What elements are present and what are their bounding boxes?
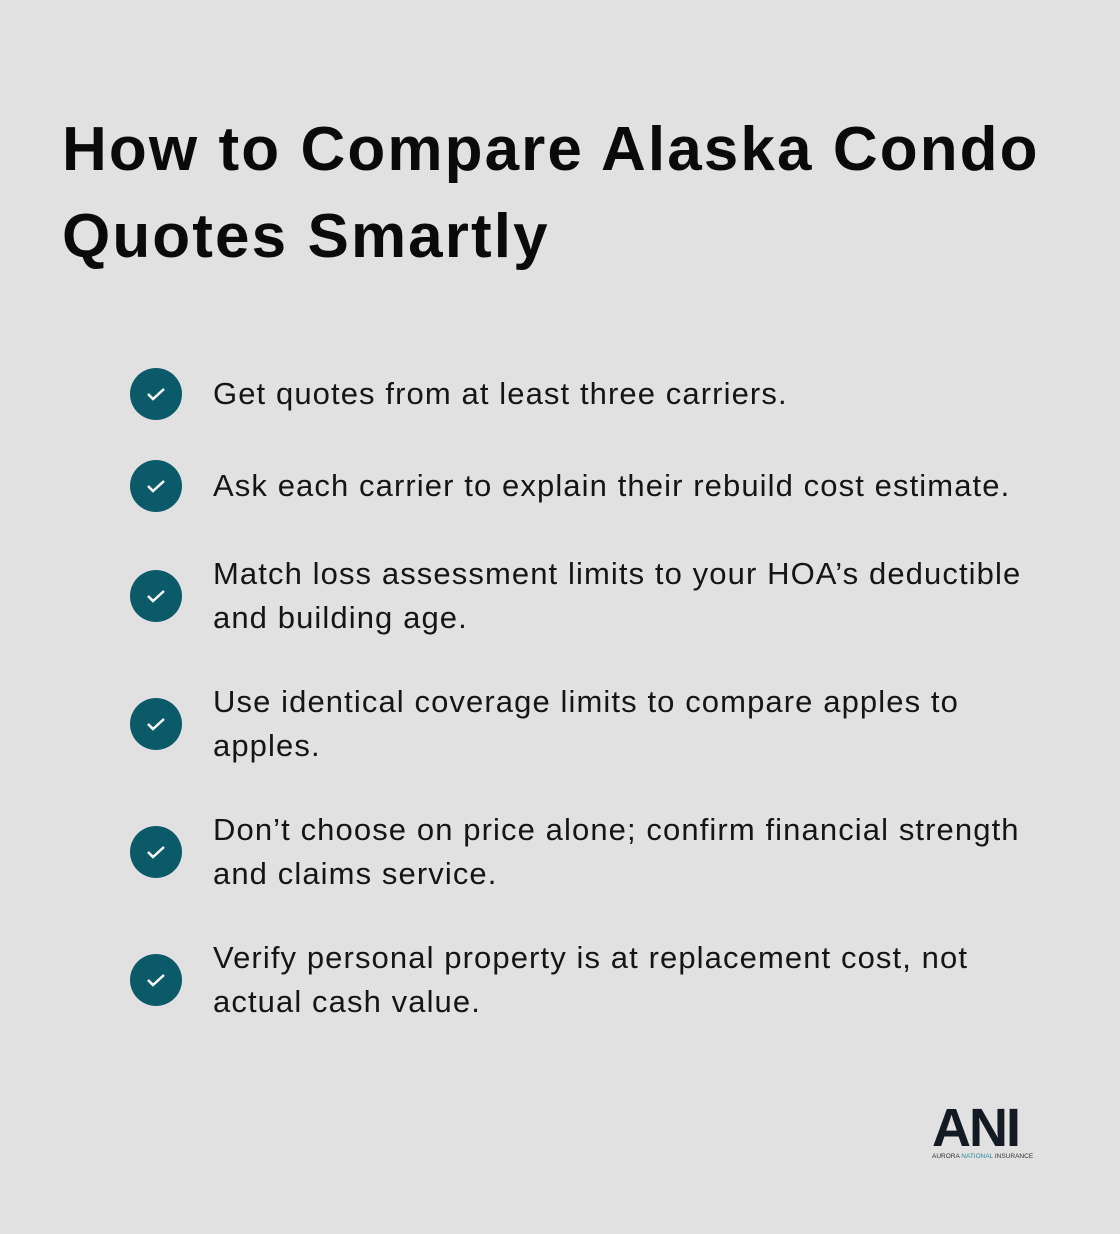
item 3 — [130, 556, 1021, 635]
icon: check — [130, 570, 182, 622]
icon: check — [130, 954, 182, 1006]
item 5 — [130, 812, 1020, 891]
icon: check — [130, 826, 182, 878]
title: Quotes Smartly — [62, 202, 550, 271]
item 5: Don’t choose on price alone; confirm financial strength — [213, 812, 1020, 847]
item 3: and building age. — [213, 600, 468, 635]
logo: ANI — [932, 1098, 1019, 1158]
title — [62, 115, 1040, 271]
title: How to Compare Alaska Condo — [62, 115, 1040, 184]
item 3: Match loss assessment limits to your HOA’s deductible — [213, 556, 1021, 591]
item 5: and claims service. — [213, 856, 498, 891]
item 1: Get quotes from at least three carriers. — [213, 376, 788, 411]
logo: AURORA NATIONAL INSURANCE — [932, 1153, 1033, 1160]
item 2 — [130, 460, 1010, 512]
item 6 — [130, 940, 968, 1019]
item 4 — [130, 684, 959, 763]
item 1 — [130, 368, 788, 420]
item 6: Verify personal property is at replacement cost, not — [213, 940, 968, 975]
icon: check — [130, 368, 182, 420]
item 4: apples. — [213, 728, 321, 763]
icon: check — [130, 460, 182, 512]
item 6: actual cash value. — [213, 984, 481, 1019]
item 2: Ask each carrier to explain their rebuild cost estimate. — [213, 468, 1010, 503]
icon: check — [130, 698, 182, 750]
item 4: Use identical coverage limits to compare apples to — [213, 684, 959, 719]
